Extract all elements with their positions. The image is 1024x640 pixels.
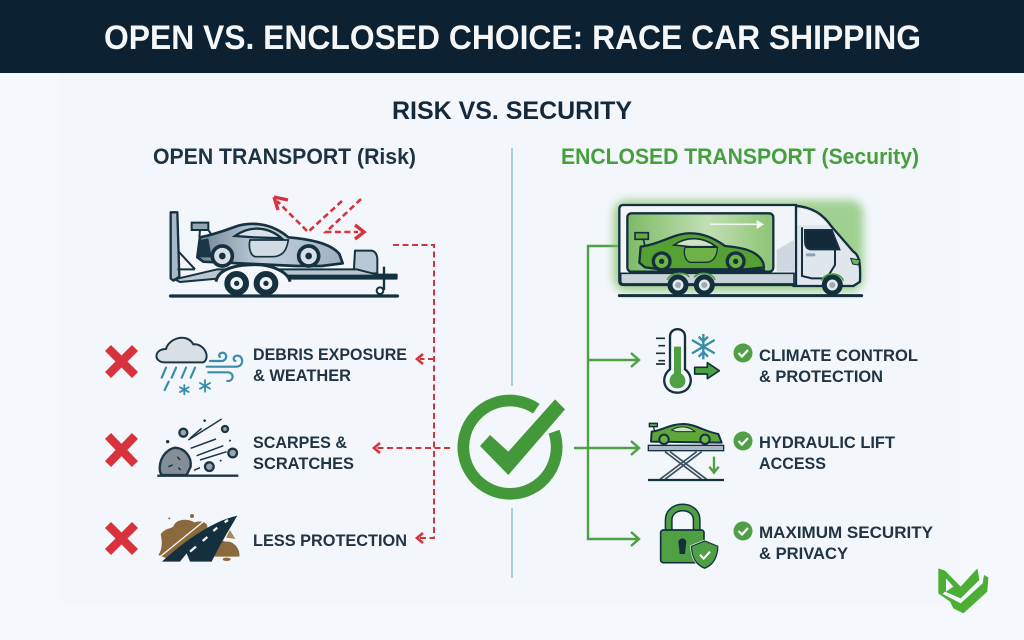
risk row: debris exposure xyxy=(111,338,407,394)
label: & PRIVACY xyxy=(759,545,848,563)
center divider xyxy=(511,148,513,578)
label: HYDRAULIC LIFT xyxy=(759,434,895,452)
trailer wheels xyxy=(227,274,275,293)
cab xyxy=(793,206,860,286)
trailer deck xyxy=(175,269,397,282)
icon: green check xyxy=(734,432,752,450)
icon: red cross xyxy=(111,528,132,549)
icon: green check xyxy=(734,522,752,540)
label: MAXIMUM SECURITY xyxy=(759,524,933,542)
jack stand xyxy=(380,267,387,290)
icon: weather cloud, rain and wind xyxy=(156,338,242,394)
green connector tree xyxy=(574,246,639,546)
label: DEBRIS EXPOSURE xyxy=(253,346,407,364)
icon: brand logo xyxy=(938,568,988,613)
trailer ramp xyxy=(171,212,179,281)
icon: red cross xyxy=(111,351,132,372)
ground line xyxy=(619,291,862,300)
ground line xyxy=(171,291,397,301)
icon: scissor lift with car xyxy=(648,423,724,480)
icon: central green check badge xyxy=(463,399,565,494)
cargo box xyxy=(619,205,796,285)
label: & WEATHER xyxy=(253,367,351,385)
trailer front box xyxy=(354,251,377,273)
label: & PROTECTION xyxy=(759,368,883,386)
title banner xyxy=(0,0,1024,73)
red dashed connector to risks xyxy=(377,245,450,538)
car wheels xyxy=(212,246,232,266)
heading: risk vs security: RISK VS. SECURITY xyxy=(392,97,632,125)
label: ACCESS xyxy=(759,455,826,473)
label: SCRATCHES xyxy=(253,455,354,473)
green glow xyxy=(613,200,863,292)
heading: open transport: OPEN TRANSPORT (Risk) xyxy=(153,144,416,169)
benefit row: hydraulic lift xyxy=(648,423,895,480)
label: SCARPES & xyxy=(253,434,347,452)
icon: damaged road with mud xyxy=(158,514,239,562)
icon: enclosed truck with green car xyxy=(613,200,863,296)
icon: open trailer with race car xyxy=(171,212,397,296)
truck wheels xyxy=(670,277,840,293)
icon: red deflection arrows xyxy=(274,197,364,239)
green car xyxy=(639,233,764,269)
risk row: less protection xyxy=(111,514,407,562)
car body xyxy=(197,224,343,266)
risk row: scrapes xyxy=(111,419,354,476)
benefit row: maximum security xyxy=(661,507,933,569)
icon: flying rock debris xyxy=(157,419,238,476)
title banner: OPEN VS. ENCLOSED CHOICE: RACE CAR SHIPPING xyxy=(104,19,921,57)
heading: enclosed transport: ENCLOSED TRANSPORT (Security) xyxy=(561,144,919,169)
icon: padlock with shield xyxy=(661,507,719,569)
icon: green check xyxy=(734,344,752,362)
benefit row: climate control xyxy=(656,329,918,393)
label: LESS PROTECTION xyxy=(253,532,407,550)
icon: red cross xyxy=(111,439,132,461)
label: CLIMATE CONTROL xyxy=(759,347,918,365)
icon: thermometer with snowflake xyxy=(656,329,719,393)
red arrowheads xyxy=(374,354,423,543)
